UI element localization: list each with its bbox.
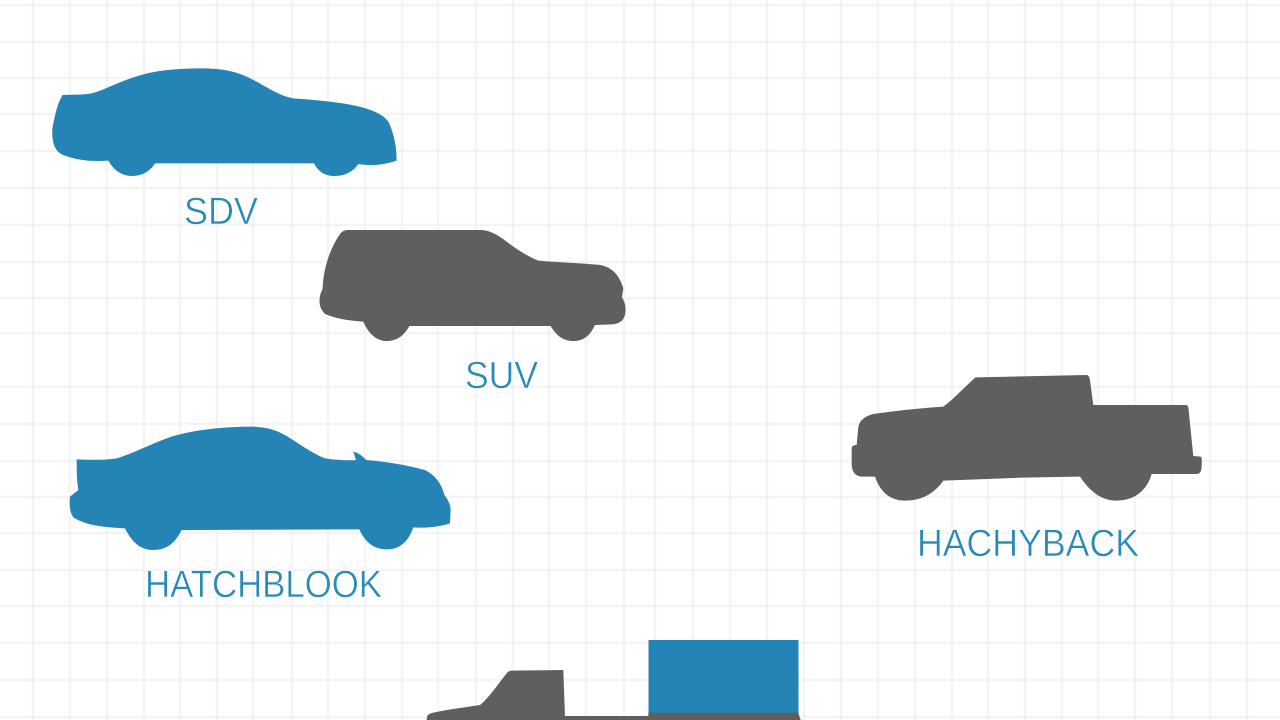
label: SUV: SUV [465, 355, 539, 397]
icon: grey pickup silhouette [852, 375, 1202, 501]
icon: grey SUV silhouette [319, 230, 626, 341]
label: HATCHBLOOK: HATCHBLOOK [145, 564, 382, 606]
icon: blue coupe silhouette [70, 427, 451, 550]
label: SDV: SDV [184, 191, 259, 233]
label: HACHYBACK: HACHYBACK [917, 523, 1139, 565]
icon: grey truck silhouette, cropped at bottom edge [427, 670, 801, 720]
icon: blue cargo box [648, 640, 798, 714]
icon: blue sedan silhouette [52, 68, 397, 176]
